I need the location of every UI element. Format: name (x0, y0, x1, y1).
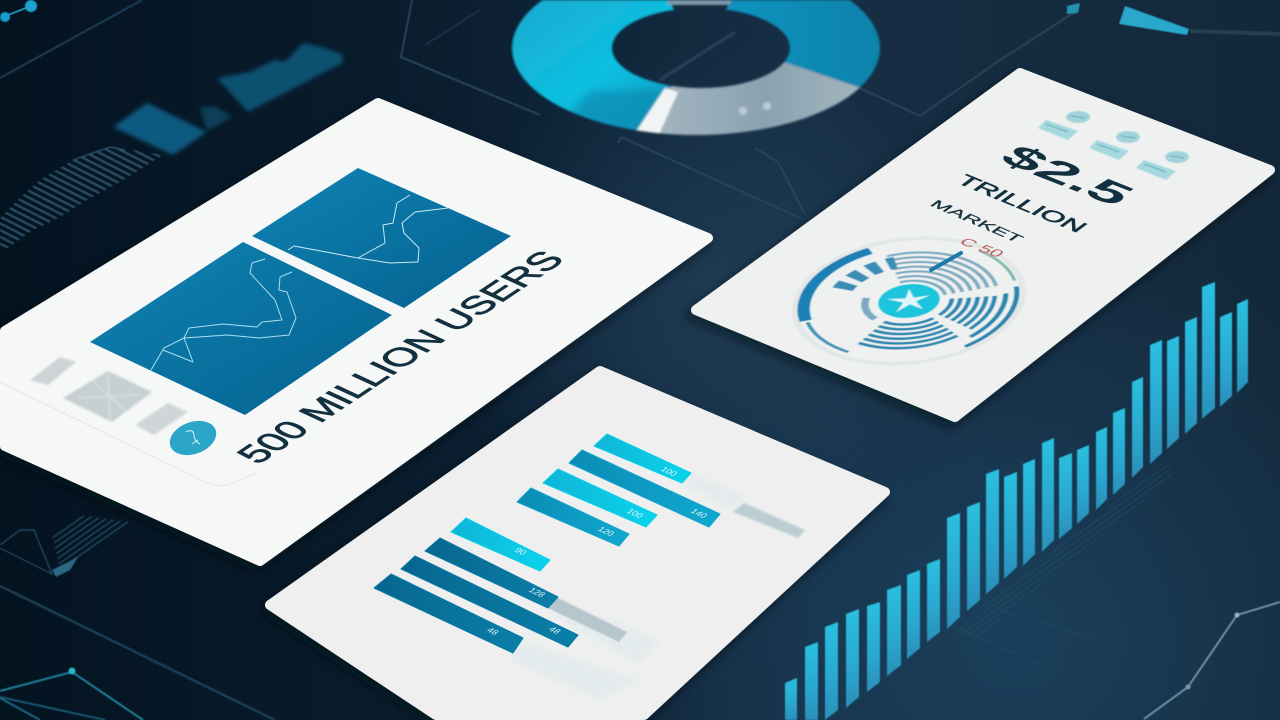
radial gauge (748, 215, 1070, 387)
bar chart: rising cyan bars (785, 282, 1248, 720)
value: $2.5: $2.5 (990, 139, 1144, 212)
donut segment: dark lower-left shade (570, 82, 666, 130)
donut chart (510, 0, 882, 136)
panel: market size card (696, 73, 1270, 417)
bar 5: 90 (512, 546, 529, 556)
bar 8: 48 (484, 626, 501, 636)
bar 1: 100 (658, 465, 680, 478)
map panel: upper (252, 168, 511, 308)
icon: cyan badge (165, 415, 221, 461)
donut segment: grey (658, 60, 862, 136)
donut segment: top grey sliver (668, 0, 732, 5)
map panel: lower (90, 242, 392, 415)
background outlines around donut (401, 0, 1280, 218)
panel: 500 million users card (0, 103, 708, 561)
bar 6: 128 (526, 586, 548, 599)
top-right marker (1067, 3, 1189, 35)
panel: horizontal bar chart card (270, 371, 885, 715)
faint background bands (510, 473, 745, 700)
grey legend chip (733, 503, 805, 538)
faded thumbnails (30, 357, 188, 435)
bar 8 (374, 574, 523, 653)
grey bar extension (548, 598, 627, 642)
bar 5 (451, 518, 550, 571)
bottom-left background lines and mini chart (0, 515, 275, 720)
label: market: MARKET (926, 198, 1027, 245)
label: trillion: TRILLION (951, 172, 1092, 236)
donut segment: white slit (635, 88, 678, 139)
bar 6 (425, 538, 558, 608)
bar 7 (401, 556, 578, 647)
bar 3: 100 (624, 507, 646, 520)
bar 4 (517, 488, 629, 546)
donut segment: cyan (510, 0, 676, 131)
bar 2 (569, 450, 720, 527)
donut segment: blue (725, 0, 882, 88)
bar 7: 48 (546, 625, 563, 635)
label: red value: C 50 (955, 235, 1008, 260)
icons: small cyan building row (1038, 111, 1189, 180)
bar 2: 140 (688, 507, 710, 520)
bar 3 (543, 469, 657, 527)
gauge needle (931, 253, 961, 270)
bar 4: 120 (595, 525, 617, 538)
bar 1 (594, 434, 691, 483)
background chart: top-left blurred bars and stripes (0, 43, 343, 248)
headline: 500 million users: 500 MILLION USERS (227, 245, 573, 468)
bottom-right line chart (905, 462, 1280, 719)
background line: top-left connector with nodes (0, 0, 142, 78)
